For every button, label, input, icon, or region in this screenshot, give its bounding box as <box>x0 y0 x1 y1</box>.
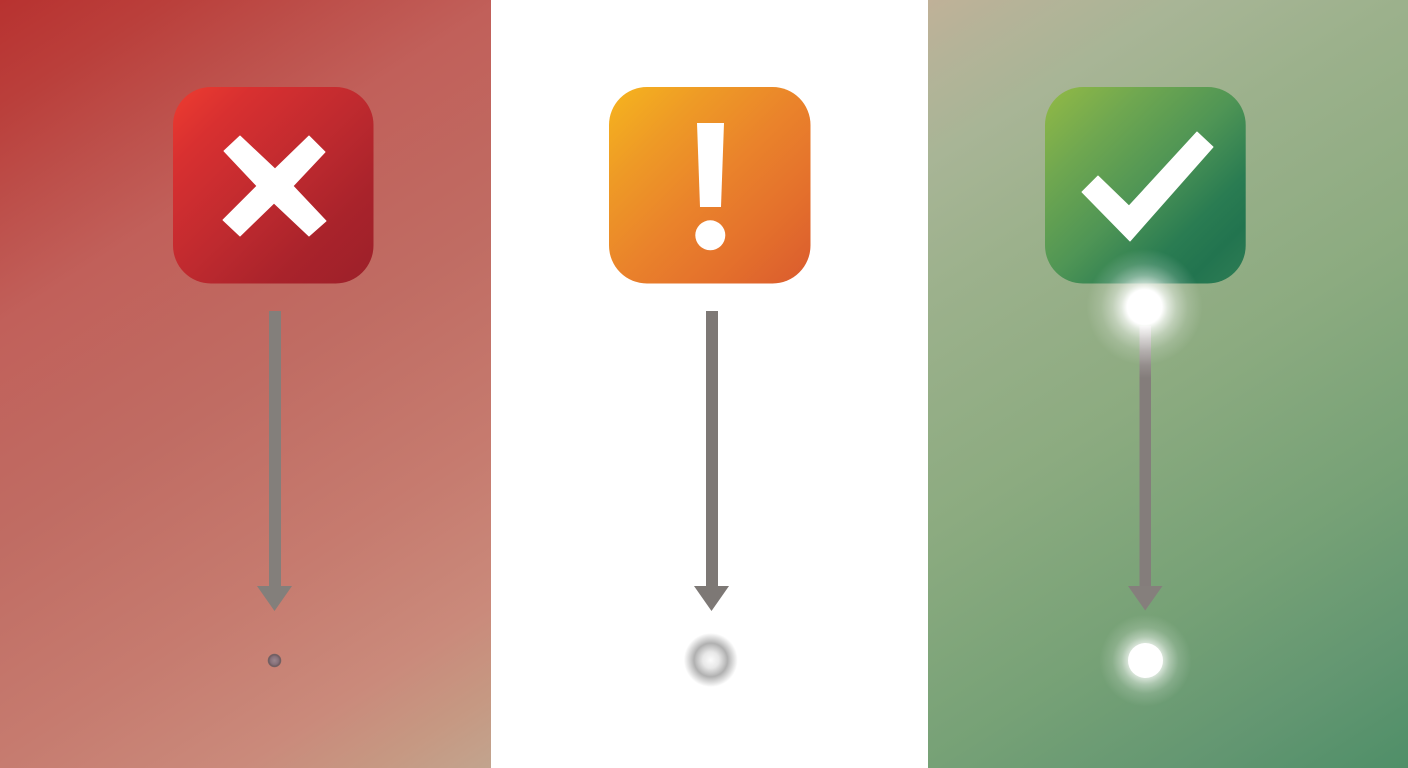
icon: green check badge <box>1045 87 1246 284</box>
panel: green success column <box>928 0 1408 768</box>
arrow: red column downward arrow <box>257 311 292 611</box>
arrow: white column downward arrow <box>694 311 729 611</box>
arrow: green column downward arrow <box>1128 326 1162 610</box>
icon: orange exclamation badge <box>609 87 810 284</box>
panel: red failure column <box>0 0 491 768</box>
panel: white warning column <box>491 0 928 768</box>
outcome dot: faint ring <box>684 633 738 687</box>
icon: red X badge <box>173 87 374 284</box>
outcome dot: bright glowing result <box>1100 614 1192 706</box>
glow: top of arrow <box>1086 249 1202 365</box>
outcome dot: tiny result <box>268 654 281 667</box>
